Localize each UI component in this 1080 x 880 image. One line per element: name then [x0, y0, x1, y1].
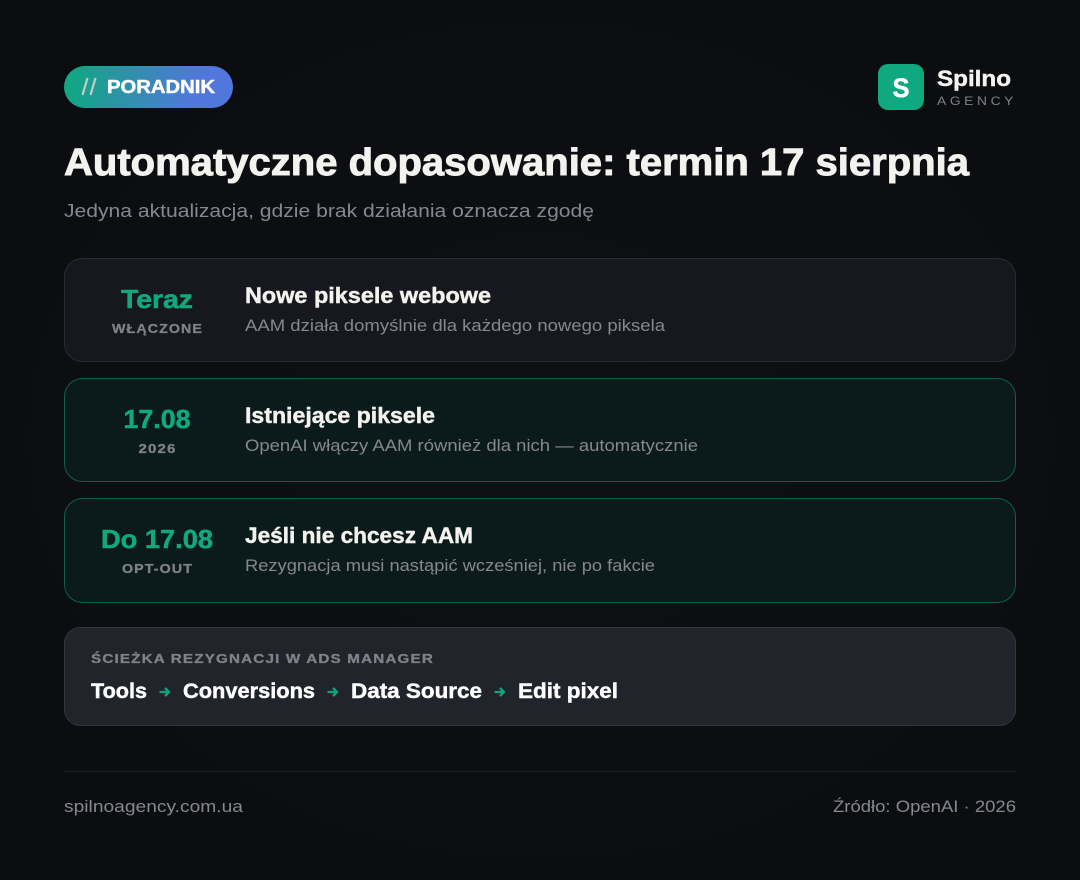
panel: nowe piksele webowe [64, 258, 1016, 362]
title: Automatyczne dopasowanie: termin 17 sierpnia [64, 142, 970, 184]
year: 2026: 2026 [138, 441, 176, 456]
heading: Nowe piksele webowe [245, 283, 491, 308]
panel: jeśli nie chcesz AAM [64, 498, 1016, 602]
logo: Spilno Agency [878, 64, 1017, 110]
panel: istniejące piksele [64, 378, 1016, 482]
icon: slashes [82, 78, 96, 95]
step: data source: Data Source [351, 680, 482, 703]
date: 17.08: 17.08 [124, 404, 190, 434]
subtitle: Jedyna aktualizacja, gdzie brak działania oznacza zgodę [64, 201, 594, 221]
arrow [328, 688, 337, 696]
step: conversions: Conversions [183, 680, 315, 703]
heading: Jeśli nie chcesz AAM [245, 523, 473, 548]
step: tools: Tools [91, 680, 147, 703]
logo: Spilno Agency: Spilno [937, 66, 1011, 91]
footer: website: spilnoagency.com.ua [64, 797, 244, 816]
description: AAM działa domyślnie dla każdego nowego piksela [245, 317, 666, 335]
arrow [494, 688, 504, 696]
badge: poradnik [64, 66, 233, 108]
panel: ścieżka rezygnacji [64, 628, 1016, 726]
logo: Spilno Agency: S [892, 73, 910, 103]
date: do 17.08: Do 17.08 [101, 524, 213, 554]
footer: source: Źródło: OpenAI · 2026 [833, 797, 1016, 816]
path label: ŚCIEŻKA REZYGNACJI W ADS MANAGER [91, 651, 434, 666]
status: opt-out: OPT-OUT [122, 561, 193, 576]
description: OpenAI włączy AAM również dla nich — automatycznie [245, 437, 698, 455]
logo: Spilno Agency: AGENCY [937, 96, 1017, 108]
badge: poradnik: PORADNIK [107, 77, 215, 97]
arrow [160, 688, 169, 696]
date: teraz: Teraz [121, 284, 193, 314]
status: włączone: WŁĄCZONE [112, 321, 203, 336]
description: Rezygnacja musi nastąpić wcześniej, nie po fakcie [245, 557, 655, 575]
heading: Istniejące piksele [245, 403, 435, 428]
step: edit pixel: Edit pixel [518, 680, 618, 703]
